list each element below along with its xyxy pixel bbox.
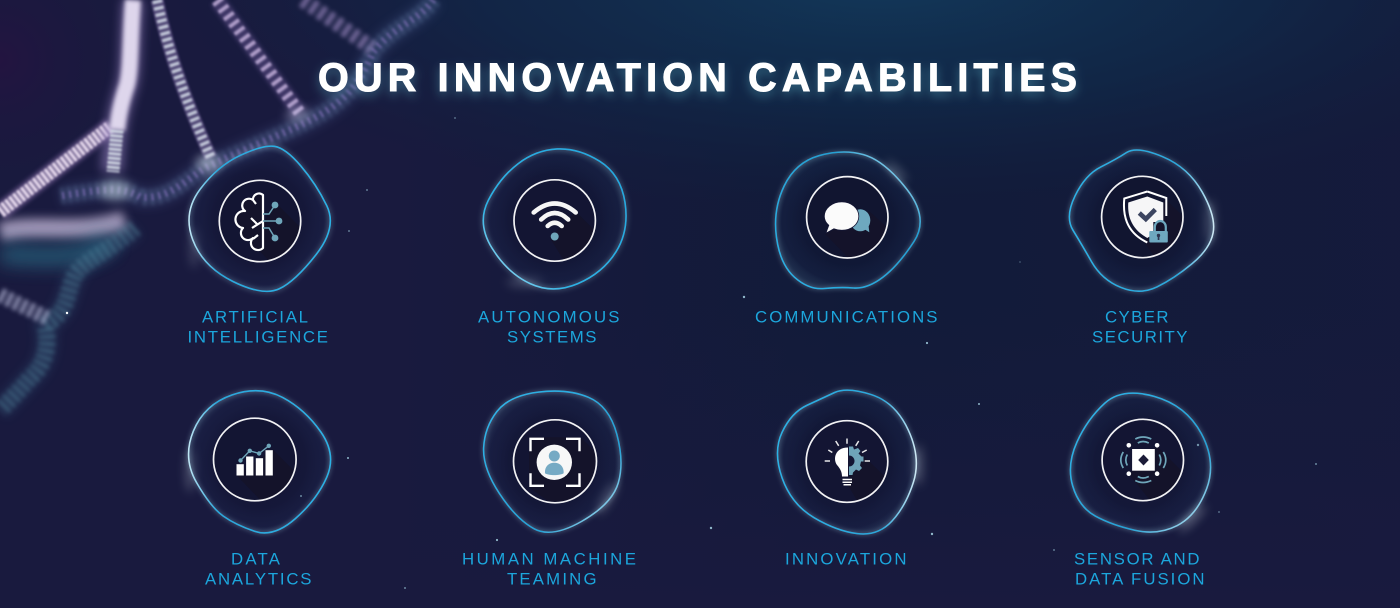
- DNA helix illustration: [0, 0, 433, 410]
- blob outline: [776, 152, 920, 289]
- label: INTELLIGENCE: [188, 328, 328, 346]
- label: TEAMING: [507, 570, 596, 588]
- panel: sensor and data fusion: [1070, 393, 1211, 588]
- panel: data analytics: [186, 391, 331, 588]
- panel: communications: [755, 152, 938, 326]
- label: ANALYTICS: [205, 570, 312, 588]
- icon: wifi: [513, 179, 596, 262]
- label: SENSOR AND: [1074, 550, 1200, 568]
- particles: [66, 117, 1317, 589]
- label: [1092, 308, 1188, 346]
- panel: autonomous systems: [478, 149, 626, 346]
- blob outline: [1070, 393, 1211, 532]
- icon: bar chart with trend line: [212, 417, 297, 502]
- label: CYBER: [1105, 308, 1168, 326]
- icon: brain circuit: [218, 180, 302, 262]
- label: SYSTEMS: [507, 328, 596, 346]
- label: [1074, 550, 1204, 588]
- label: HUMAN MACHINE: [462, 550, 636, 568]
- icon: shield and padlock: [1100, 176, 1184, 258]
- label: [205, 550, 312, 588]
- label: INNOVATION: [785, 550, 906, 568]
- label: COMMUNICATIONS: [755, 308, 938, 326]
- panel: human machine teaming: [462, 391, 636, 588]
- label: DATA FUSION: [1075, 570, 1204, 588]
- icon: speech bubbles: [806, 176, 889, 259]
- blob outline: [484, 391, 621, 532]
- panel: artificial intelligence: [188, 146, 330, 346]
- label: ARTIFICIAL: [202, 308, 308, 326]
- label: SECURITY: [1092, 328, 1188, 346]
- label: [478, 308, 620, 346]
- icon: sensor chip: [1101, 418, 1184, 502]
- icon: person in focus frame: [512, 419, 598, 504]
- label: DATA: [231, 550, 281, 568]
- blob outline: [189, 146, 330, 291]
- icon: lightbulb and gear: [805, 420, 889, 504]
- label: AUTONOMOUS: [478, 308, 620, 326]
- blob outline: [777, 390, 916, 534]
- title: OUR INNOVATION CAPABILITIES: [318, 56, 1077, 100]
- label: [188, 308, 328, 346]
- label: [462, 550, 636, 588]
- blob outline: [1069, 150, 1214, 291]
- blob outline: [189, 391, 331, 533]
- blob outline: [483, 149, 626, 289]
- panel: cyber security: [1069, 150, 1214, 346]
- panel: innovation: [777, 390, 922, 568]
